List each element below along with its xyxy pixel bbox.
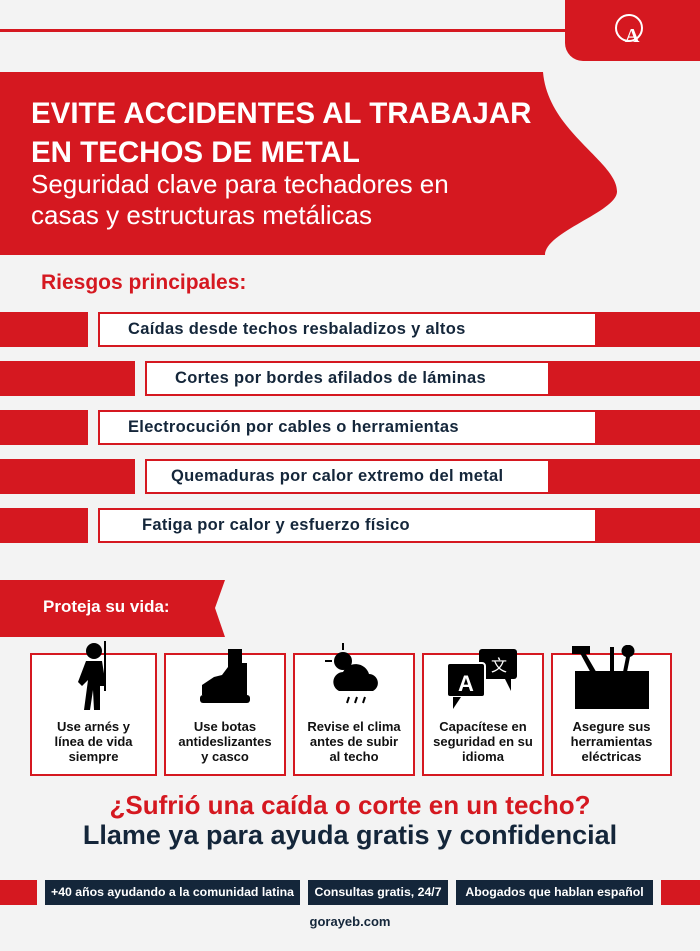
card: weather: al techo: [329, 749, 379, 764]
title: EVITE ACCIDENTES AL TRABAJAR: [31, 97, 531, 130]
CTA call: Llame ya para ayuda gratis y confidencial: [83, 820, 617, 850]
card: weather: [293, 653, 415, 776]
heading: riesgos: Riesgos principales:: [41, 271, 246, 294]
title: EN TECHOS DE METAL: [31, 136, 360, 169]
card: harness: Use arnés y: [57, 719, 130, 734]
card: boot: [164, 653, 286, 776]
card: tools: herramientas: [571, 734, 652, 749]
risk 2: [145, 361, 550, 396]
card: tools: [551, 653, 672, 776]
banner: proteja: [0, 580, 225, 637]
risk 2: Cortes por bordes afilados de láminas: [175, 369, 486, 387]
card: boot: antideslizantes: [178, 734, 272, 749]
card: language: Capacítese en: [439, 719, 527, 734]
card: language: A: [458, 671, 474, 696]
card: language: 文: [491, 652, 507, 676]
card: tools: eléctricas: [582, 749, 642, 764]
card: weather: antes de subir: [310, 734, 398, 749]
banner: proteja: Proteja su vida:: [43, 597, 170, 616]
card: harness: siempre: [69, 749, 118, 764]
hero banner: [0, 72, 617, 255]
risk 3: [98, 410, 597, 445]
card: boot: Use botas: [194, 719, 256, 734]
risk 1: Caídas desde techos resbaladizos y altos: [128, 320, 466, 338]
footer bar: Abogados que hablan español: [465, 885, 644, 899]
risk 1: [98, 312, 597, 347]
card: tools: Asegure sus: [572, 719, 651, 734]
card: harness: [30, 653, 157, 776]
risk 4: Quemaduras por calor extremo del metal: [171, 467, 503, 485]
risk 3: Electrocución por cables o herramientas: [128, 418, 459, 436]
subtitle: [31, 169, 449, 230]
risk 5: Fatiga por calor y esfuerzo físico: [142, 516, 410, 534]
card: boot: y casco: [201, 749, 249, 764]
subtitle: casas y estructuras metálicas: [31, 200, 372, 230]
footer bar: Consultas gratis, 24/7: [314, 885, 442, 899]
risk 5: [98, 508, 597, 543]
website: gorayeb.com: [310, 914, 390, 929]
risk list: [0, 312, 700, 543]
card: language: [422, 653, 544, 776]
subtitle: Seguridad clave para techadores en: [31, 169, 449, 199]
logo: A: [625, 25, 640, 47]
card: harness: línea de vida: [54, 734, 133, 749]
title: [31, 97, 531, 169]
CTA question: ¿Sufrió una caída o corte en un techo?: [109, 790, 591, 820]
logo: [565, 0, 700, 61]
footer bar: +40 años ayudando a la comunidad latina: [51, 885, 294, 899]
card: language: idioma: [462, 749, 504, 764]
footer bar: [0, 880, 700, 905]
card: weather: Revise el clima: [307, 719, 401, 734]
card: language: seguridad en su: [433, 734, 533, 749]
risk 4: [145, 459, 550, 494]
